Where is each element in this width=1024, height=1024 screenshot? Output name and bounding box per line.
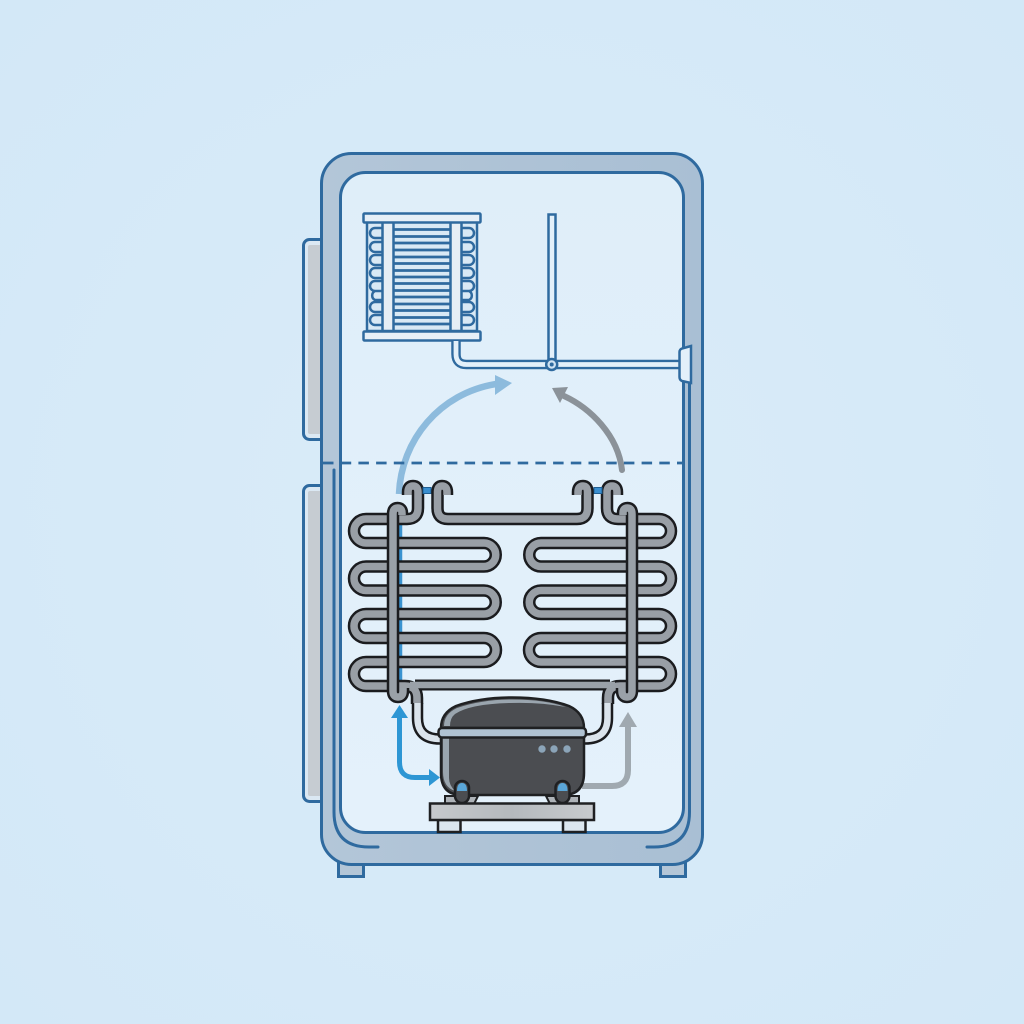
wall bracket [680,346,691,383]
condenser top bar [364,214,480,222]
pipe junction node [546,359,557,370]
condenser unit [364,214,480,340]
refrigerant flow arrow: gray [582,712,637,786]
dashed divider line [323,462,683,464]
capillary piping [456,214,691,383]
rising air arrow: gray [552,387,622,470]
inner compartment [340,172,684,832]
refrigerant flow arrow: blue [391,705,440,786]
mounting brackets [445,796,579,804]
platform top [430,804,594,820]
indicator dots [538,745,571,753]
left coil [354,486,496,704]
condenser fin background [367,222,477,331]
condenser left post [382,222,394,331]
rising air arrow: light blue [399,375,512,494]
upper door handle [304,240,328,440]
condenser right coil [462,228,474,325]
blue stripe behind evaporator [399,525,402,684]
condenser right post [450,222,462,331]
bottom connecting tube core [410,682,615,688]
condenser left coil [370,228,382,325]
outer body [322,154,702,864]
compressor dome [441,698,584,728]
top connecting tube [438,486,588,519]
left frame trim line [334,470,378,847]
lower door handle [304,486,328,802]
left foot [338,860,364,876]
right compressor foot [556,781,570,803]
left compressor foot [455,781,469,803]
compressor band [438,728,586,738]
right frame trim line [647,382,690,847]
compressor suction and discharge lines [418,703,608,739]
platform legs [438,820,586,832]
right foot [660,860,686,876]
compressor [438,698,586,803]
refrigerator cabinet [304,154,702,876]
right coil [529,486,671,704]
vertical pipe [548,214,556,361]
evaporator coils [354,486,671,704]
compressor lower body [441,735,584,795]
bottom connecting tube outline [415,680,610,690]
horizontal pipe with elbow [456,341,681,364]
compressor mounting platform [430,796,594,832]
condenser fins [394,230,450,324]
condenser bottom bar [364,332,480,340]
